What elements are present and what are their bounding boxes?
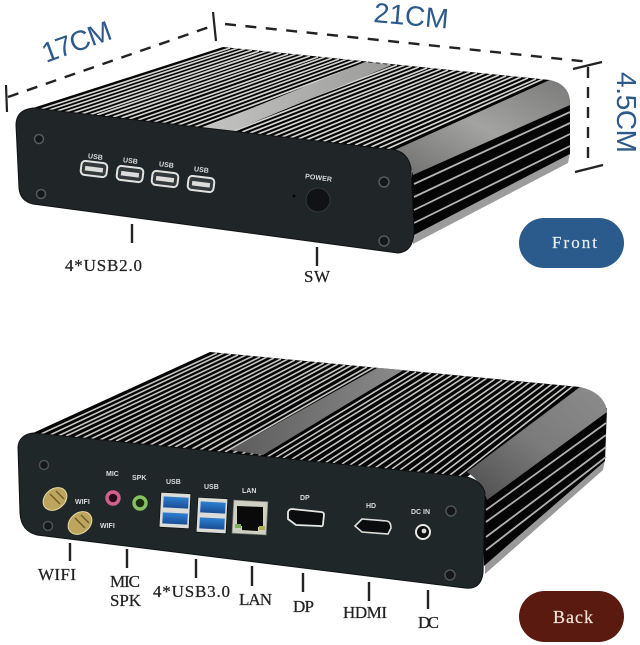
- USB 3.0 ports: USB: [204, 484, 219, 491]
- front device: [16, 47, 570, 253]
- label: 4*USB2.0: [65, 224, 142, 275]
- WIFI antenna connectors: [39, 483, 115, 539]
- LAN port: [232, 488, 268, 535]
- label: DP: DP: [293, 597, 314, 616]
- screws: front panel: [34, 134, 389, 246]
- label: LAN: [239, 566, 272, 609]
- USB 2.0 ports: USB: [123, 157, 138, 166]
- DC jack: DC IN: [411, 509, 430, 516]
- dimension: 17CM depth: [6, 12, 216, 112]
- back panel: [18, 433, 485, 588]
- USB 3.0 ports: [159, 479, 228, 534]
- top fins: front device: [33, 47, 550, 150]
- badge: Back: Back: [553, 607, 593, 627]
- front panel: [16, 108, 414, 253]
- label: DC: DC: [418, 613, 439, 632]
- side fins: front device: [395, 80, 570, 244]
- audio jacks: MIC and SPK: MIC: [106, 471, 119, 478]
- USB 2.0 ports: USB: [88, 153, 103, 162]
- label: MIC SPK: SPK: [110, 591, 142, 610]
- badge: Front: [519, 218, 624, 268]
- DC jack: [411, 509, 430, 539]
- USB 2.0 ports: USB: [159, 161, 174, 170]
- label: DP: [293, 573, 314, 616]
- audio jacks: MIC and SPK: SPK: [132, 475, 146, 482]
- label: 4*USB3.0: [153, 559, 230, 601]
- label: WIFI: WIFI: [38, 565, 76, 584]
- audio jacks: MIC and SPK: [106, 471, 146, 509]
- label: 4*USB2.0: 4*USB2.0: [65, 256, 142, 275]
- dimension: 21CM width: [225, 0, 602, 69]
- USB 2.0 ports: USB: [194, 166, 209, 175]
- USB 3.0 ports: USB: [166, 479, 181, 486]
- DP port: [288, 495, 324, 526]
- label: LAN: LAN: [239, 590, 272, 609]
- back device: [18, 352, 607, 588]
- power button: [292, 173, 332, 212]
- label: 4*USB3.0: 4*USB3.0: [153, 582, 230, 601]
- HDMI port: HD: [366, 503, 376, 510]
- label: HDMI: [343, 582, 387, 622]
- label: MIC SPK: [110, 549, 142, 610]
- top fins: back device: [33, 352, 580, 477]
- screws: back panel: [40, 460, 456, 580]
- label: SW: [304, 247, 331, 286]
- USB 2.0 ports: [80, 153, 215, 193]
- badge: Back: [519, 591, 624, 642]
- WIFI antenna connectors: WIFI: [75, 499, 90, 506]
- dimension: 4.5CM height: [575, 67, 640, 172]
- WIFI antenna connectors: WIFI: [100, 523, 115, 530]
- DP port: DP: [300, 495, 310, 502]
- side fins: back device: [467, 387, 607, 574]
- label: HDMI: HDMI: [343, 603, 387, 622]
- label: WIFI: [38, 543, 76, 584]
- label: SW: SW: [304, 267, 331, 286]
- HDMI port: [355, 503, 391, 534]
- badge: Front: Front: [552, 233, 597, 252]
- label: DC: [418, 590, 439, 632]
- power button: POWER: [305, 173, 332, 184]
- dimension: 17CM depth: 17CM: [37, 15, 116, 69]
- LAN port: LAN: [242, 488, 256, 495]
- label: MIC SPK: MIC: [110, 572, 140, 591]
